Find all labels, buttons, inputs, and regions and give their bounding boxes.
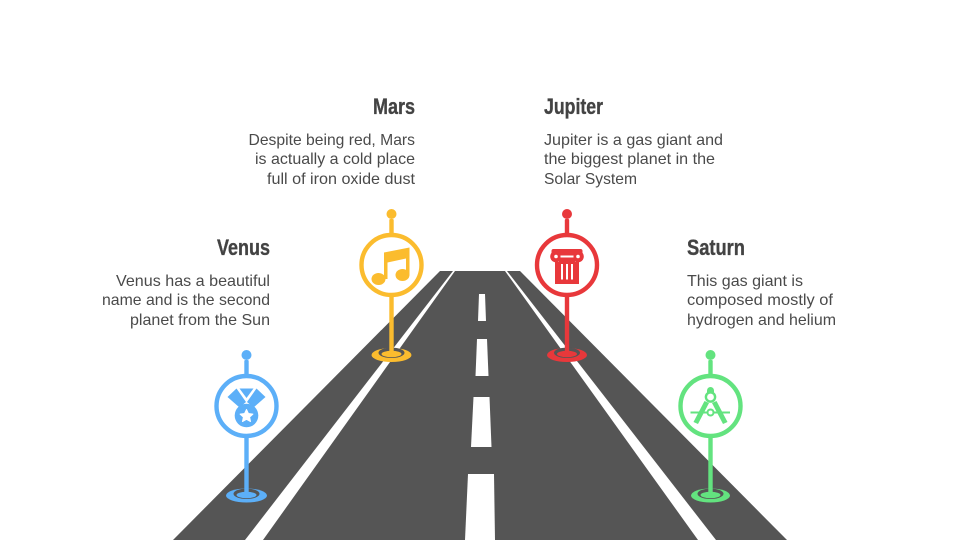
text block: Mars: is actually a cold place	[255, 151, 415, 168]
text block: Mars: Mars	[373, 94, 415, 119]
text block: Jupiter: the biggest planet in the	[544, 151, 715, 168]
text block: Mars: Despite being red, Mars	[248, 132, 415, 149]
text block: Saturn: composed mostly of	[687, 292, 834, 309]
text block: Venus: Venus	[217, 235, 270, 260]
text block: Jupiter: Jupiter is a gas giant and	[544, 132, 723, 149]
icon: compass	[690, 387, 730, 424]
pin: Saturn compass	[680, 350, 740, 502]
icon: music notes	[372, 248, 410, 285]
text block: Mars	[248, 94, 416, 188]
text block: Saturn: This gas giant is	[687, 273, 803, 290]
text block: Saturn	[687, 235, 836, 329]
text block: Mars: full of iron oxide dust	[267, 171, 416, 188]
pin: Jupiter column	[537, 209, 597, 362]
text block: Jupiter: Jupiter	[544, 94, 603, 119]
icon: medal	[228, 388, 266, 427]
text block: Venus: name and is the second	[102, 292, 270, 309]
road	[173, 271, 787, 540]
text block: Jupiter	[544, 94, 723, 188]
pin: Mars music	[362, 209, 422, 362]
icon: column	[550, 249, 584, 284]
text block: Venus: Venus has a beautiful	[116, 273, 270, 290]
text block: Jupiter: Solar System	[544, 171, 637, 188]
text block: Saturn: hydrogen and helium	[687, 312, 836, 329]
pin: Venus medal	[216, 350, 276, 502]
text block: Venus: planet from the Sun	[130, 312, 270, 329]
text block: Saturn: Saturn	[687, 235, 745, 260]
text block: Venus	[102, 235, 270, 329]
